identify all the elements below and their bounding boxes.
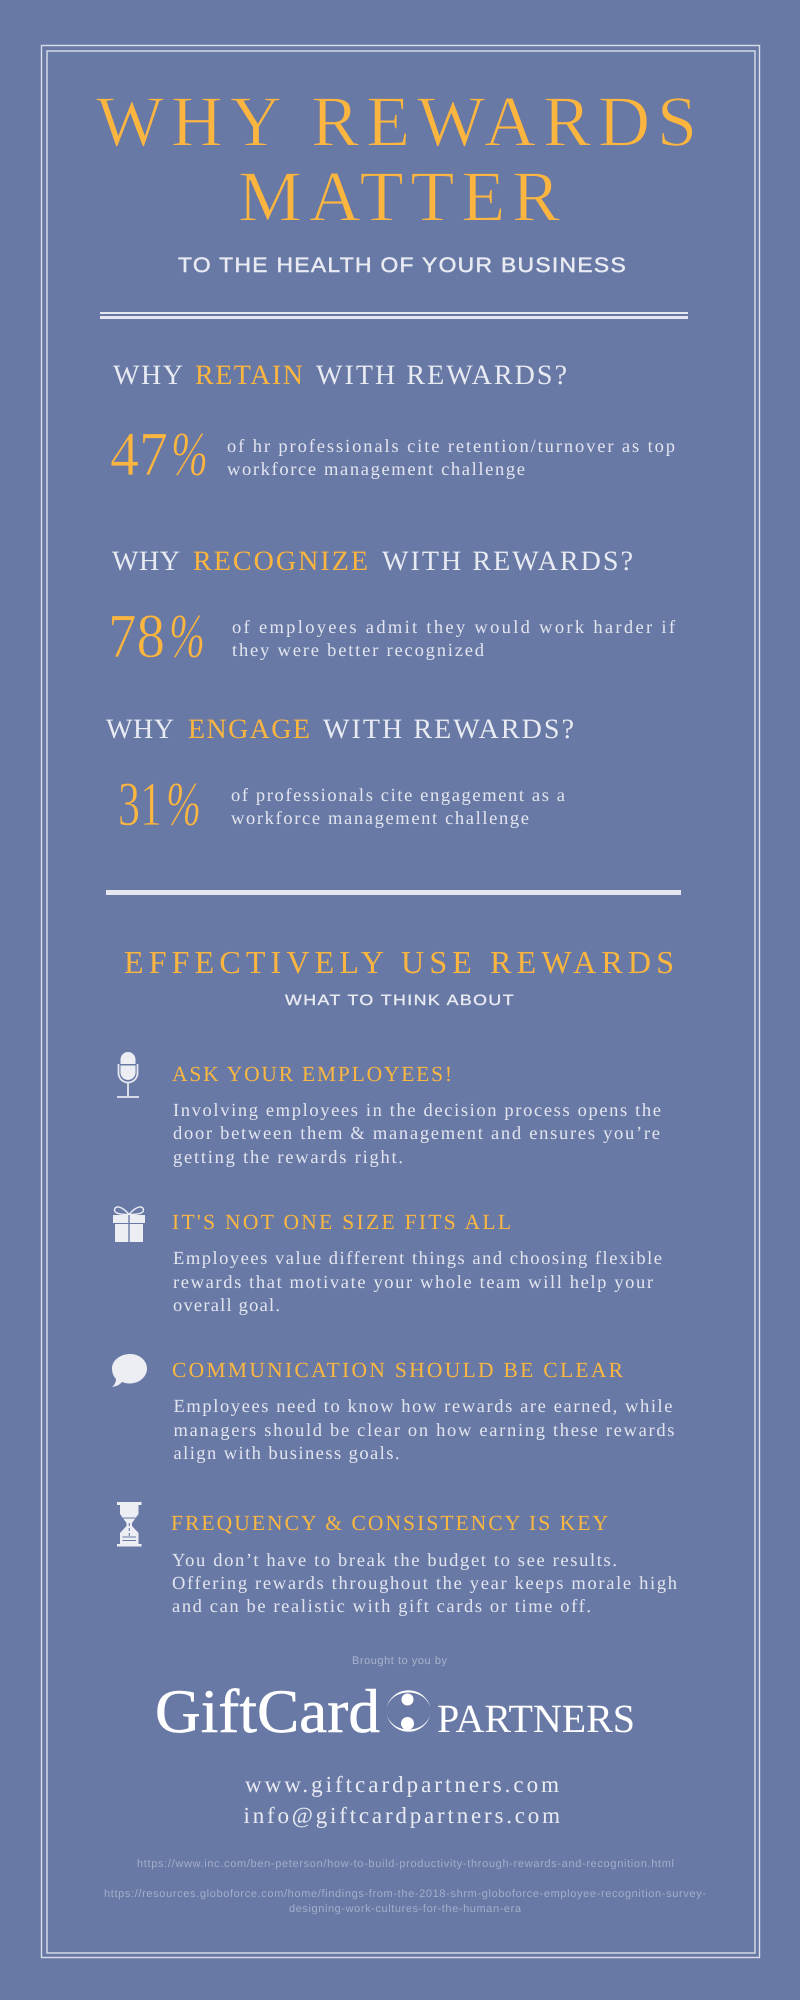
- sources: https://resources.globoforce.com/home/findings-from-the-2018-shrm-globoforce-employee-recognition-survey-: [104, 1888, 706, 1900]
- stat: 78%: 78: [108, 601, 165, 671]
- tip body: and can be realistic with gift cards or time off.: [172, 1597, 591, 1617]
- heading: why retain: [113, 360, 567, 391]
- subheading: what to think about: WHAT TO THINK ABOUT: [285, 992, 515, 1009]
- tip: not one size fits all: [113, 1207, 662, 1316]
- tip body: managers should be clear on how earning these rewards: [174, 1421, 675, 1441]
- stat: 31%: 31: [118, 769, 162, 839]
- heading: why recognize: RECOGNIZE: [193, 546, 368, 577]
- logo mark: [386, 1690, 430, 1732]
- tip body: overall goal.: [173, 1296, 280, 1316]
- heading: why engage: WITH REWARDS?: [323, 714, 574, 745]
- stat: 31%: %: [166, 769, 201, 839]
- tip body: [172, 1551, 677, 1617]
- icon: speech bubble: [112, 1354, 147, 1387]
- heading: why recognize: WITH REWARDS?: [382, 546, 633, 577]
- heading: why engage: [106, 714, 574, 745]
- contact details: www.giftcardpartners.com: [245, 1772, 559, 1797]
- tip heading: IT'S NOT ONE SIZE FITS ALL: [172, 1210, 511, 1234]
- description: engagement: workforce management challenge: [231, 809, 529, 829]
- description: engagement: of professionals cite engagement as a: [231, 786, 565, 806]
- description: engagement: [231, 786, 565, 829]
- tip heading: FREQUENCY & CONSISTENCY IS KEY: [171, 1511, 608, 1535]
- tip body: You don’t have to break the budget to see results.: [172, 1551, 617, 1571]
- logo: gift card partners: PARTNERS: [437, 1696, 635, 1741]
- sources: [104, 1858, 706, 1915]
- heading: why engage: ENGAGE: [188, 714, 310, 745]
- tip body: align with business goals.: [174, 1444, 400, 1464]
- tip: communication: [112, 1354, 675, 1464]
- description: retention: of hr professionals cite retention/turnover as top: [227, 437, 675, 457]
- subtitle: TO THE HEALTH OF YOUR BUSINESS: [178, 254, 627, 277]
- stat: 78%: [108, 601, 205, 671]
- heading: why retain: WITH REWARDS?: [316, 360, 567, 391]
- heading: why engage: WHY: [106, 714, 174, 745]
- sources: designing-work-cultures-for-the-human-era: [289, 1903, 522, 1915]
- heading: effectively use rewards: EFFECTIVELY USE REWARDS: [124, 944, 674, 980]
- brought to you by: Brought to you by: [352, 1655, 448, 1667]
- icon: gift: [113, 1207, 145, 1242]
- heading: why recognize: [112, 546, 633, 577]
- heading: why recognize: WHY: [112, 546, 180, 577]
- description: recognition: they were better recognized: [232, 641, 485, 661]
- tip body: Employees value different things and choosing flexible: [173, 1249, 662, 1269]
- section: why engage: [106, 714, 574, 839]
- icon: hourglass: [117, 1502, 142, 1546]
- tip: ask your employees: [117, 1052, 661, 1168]
- description: retention: [227, 437, 675, 480]
- description: recognition: [232, 618, 676, 661]
- logo: gift card partners: [155, 1678, 635, 1746]
- tip body: Employees need to know how rewards are earned, while: [174, 1397, 672, 1417]
- stat: 47%: %: [171, 419, 208, 489]
- tip body: [174, 1397, 675, 1464]
- tip body: Offering rewards throughout the year keeps morale high: [172, 1574, 677, 1594]
- tip: frequency: [117, 1502, 677, 1617]
- heading: why retain: WHY: [113, 360, 183, 391]
- tip body: getting the rewards right.: [173, 1148, 403, 1168]
- heading: why retain: RETAIN: [195, 360, 303, 391]
- stat: 78%: %: [169, 601, 205, 671]
- tip body: Involving employees in the decision process opens the: [173, 1101, 661, 1121]
- tip body: door between them & management and ensures you’re: [173, 1124, 660, 1144]
- section: why recognize: [108, 546, 676, 671]
- title: MATTER: [238, 156, 560, 236]
- title: [96, 82, 697, 236]
- title: WHY REWARDS: [96, 82, 697, 162]
- stat: 47%: [110, 419, 208, 489]
- stat: 47%: 47: [110, 419, 168, 489]
- tip heading: ASK YOUR EMPLOYEES!: [172, 1062, 452, 1086]
- description: retention: workforce management challenge: [227, 460, 525, 480]
- logo: gift card partners: GiftCard: [155, 1678, 380, 1746]
- contact details: info@giftcardpartners.com: [244, 1803, 560, 1828]
- contact details: [244, 1772, 560, 1828]
- sources: https://www.inc.com/ben-peterson/how-to-build-productivity-through-rewards-and-recognition.html: [137, 1858, 674, 1870]
- tip body: rewards that motivate your whole team will help your: [173, 1273, 653, 1293]
- description: recognition: of employees admit they would work harder if: [232, 618, 676, 638]
- tip heading: COMMUNICATION SHOULD BE CLEAR: [172, 1358, 624, 1382]
- tip body: [173, 1101, 661, 1168]
- tip body: [173, 1249, 662, 1316]
- section: why retain: [110, 360, 675, 489]
- icon: microphone: [117, 1052, 139, 1097]
